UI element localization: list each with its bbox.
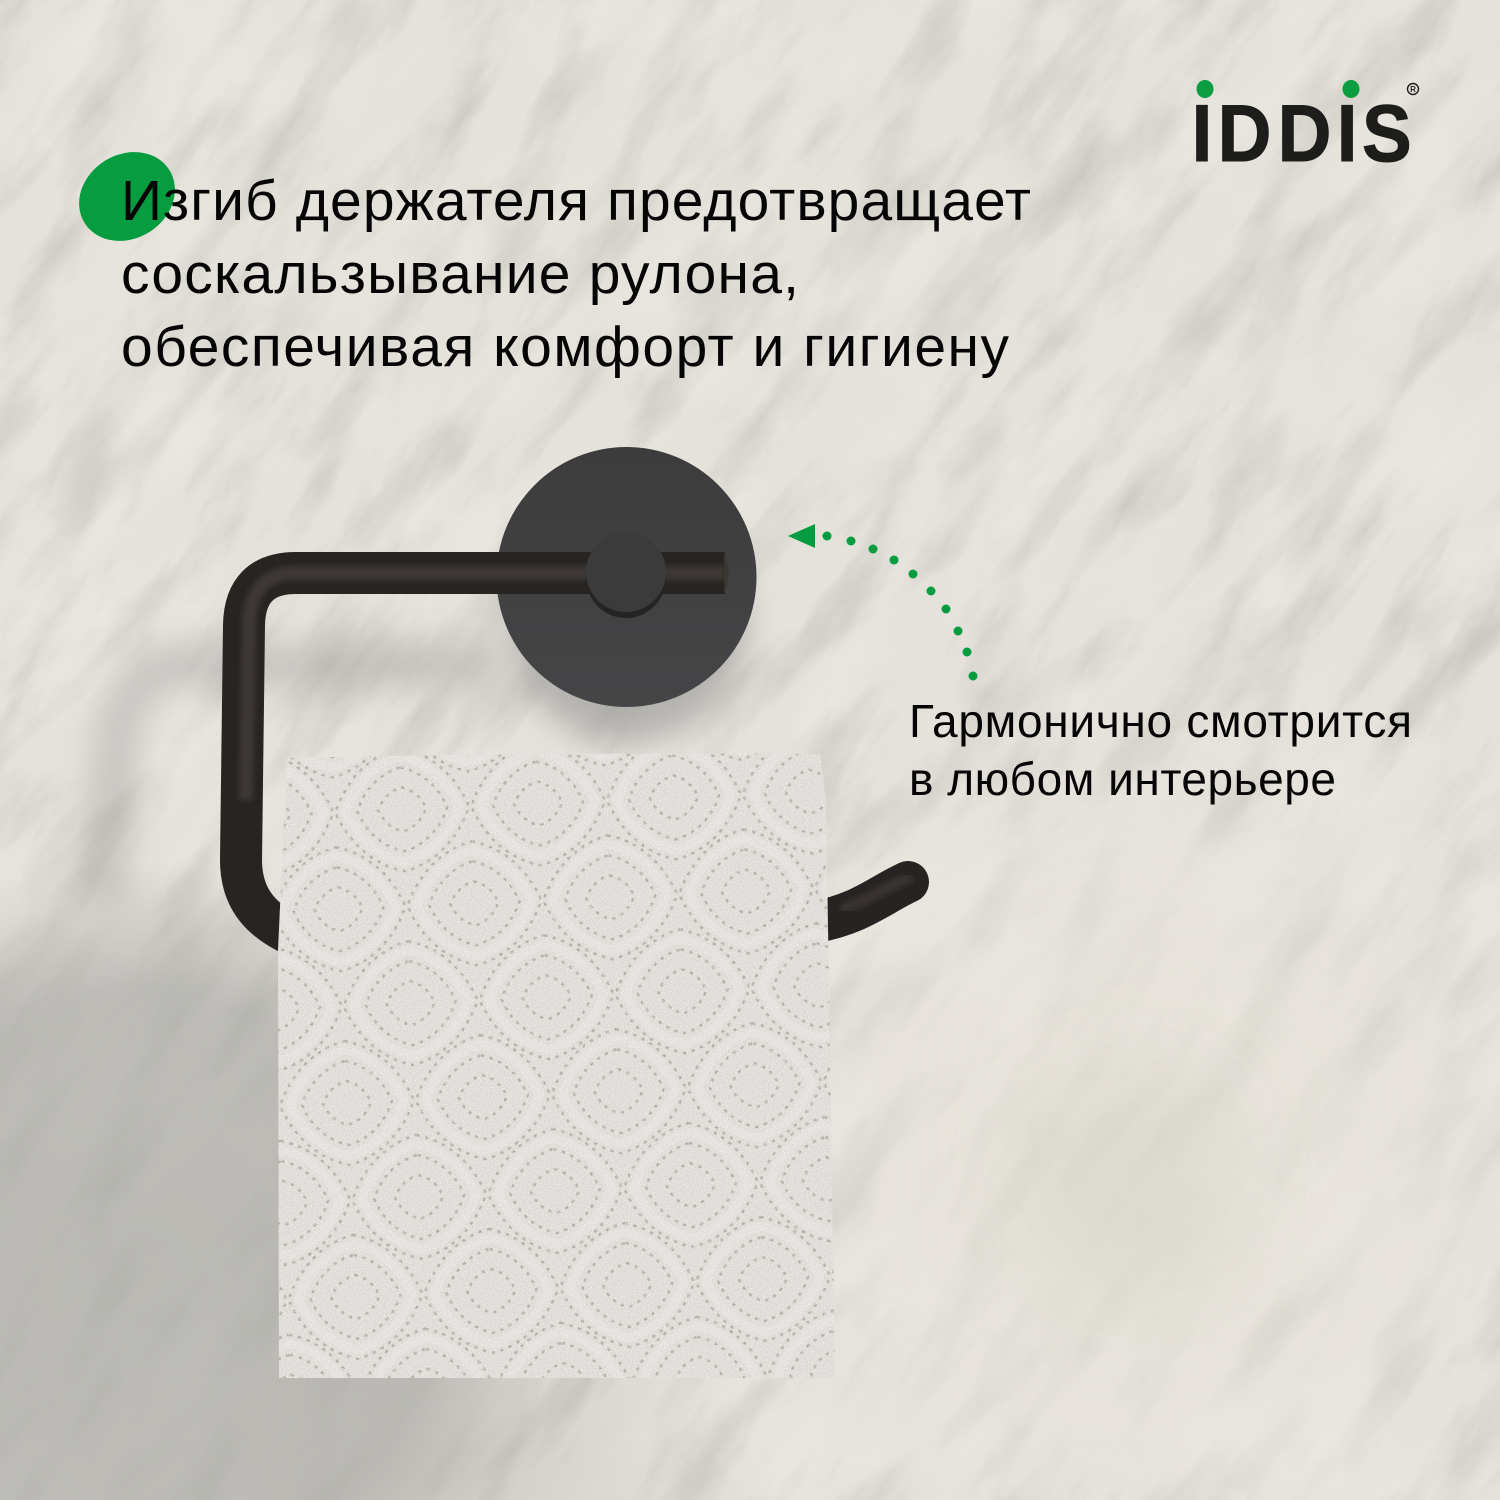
green blob accent (62, 134, 192, 259)
callout text: Гармонично смотрится (909, 695, 1412, 747)
shadows on wall (0, 507, 780, 1500)
holder: bent tube (241, 553, 728, 942)
holder: center knob (586, 532, 666, 618)
heading: соскальзывание рулона, (121, 242, 799, 306)
heading: Изгиб держателя предотвращает (121, 169, 1031, 233)
arrow: dotted curve (788, 524, 978, 680)
logo: IDDIS: R (1410, 85, 1416, 94)
heading (121, 169, 1031, 379)
callout text: в любом интерьере (909, 753, 1336, 805)
holder: wall plate (496, 447, 756, 707)
paper roll (278, 754, 835, 1378)
callout text (909, 695, 1412, 805)
heading: обеспечивая комфорт и гигиену (121, 315, 1010, 379)
holder: hook tip (815, 878, 908, 922)
logo: IDDIS: IDDIS (1192, 89, 1412, 179)
